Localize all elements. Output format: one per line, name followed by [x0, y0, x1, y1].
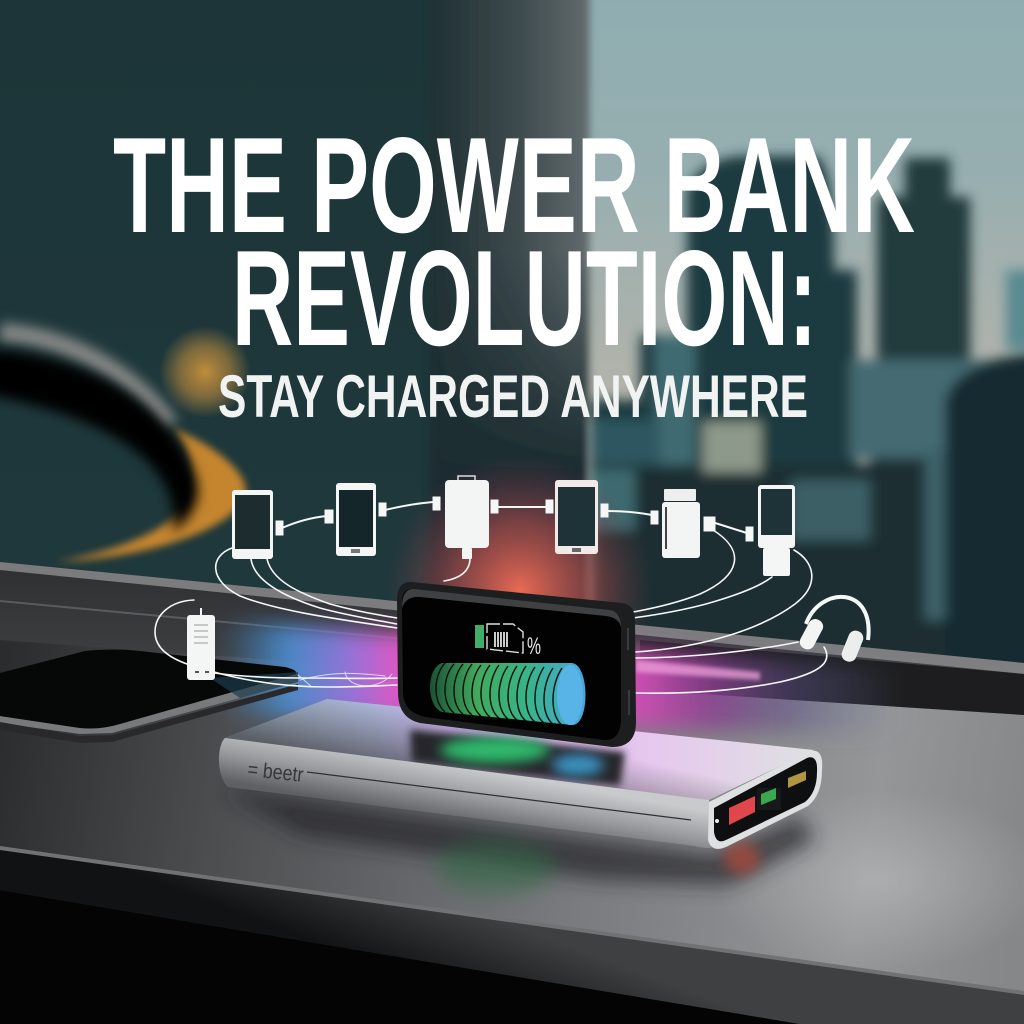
red glow: [385, 455, 655, 725]
white power adapter: [187, 608, 215, 680]
seam line: [307, 772, 691, 820]
title: [113, 109, 915, 430]
end face with ports: [708, 751, 822, 849]
green reflection: [410, 730, 625, 786]
phone 6 with plug: [758, 485, 795, 576]
charging cables: [155, 530, 827, 693]
reflection on desk: [222, 790, 815, 894]
colour glow across sill and desk: [220, 620, 900, 735]
top face: [225, 699, 814, 800]
connected devices row: [232, 476, 795, 576]
front face: [219, 738, 716, 848]
screen: [402, 589, 621, 740]
battery level icon: [475, 624, 541, 660]
green port: [757, 788, 781, 810]
brand mark: = beetr: [246, 758, 305, 787]
indicator light: [715, 819, 719, 823]
side buttons: [628, 628, 629, 715]
blurred curved object: [0, 332, 246, 562]
tablet on desk: [0, 650, 298, 743]
battery level icon: %: [527, 633, 541, 660]
short connector links: [276, 497, 753, 541]
phone 4: [555, 480, 598, 554]
case: [397, 582, 636, 747]
phone 2: [336, 483, 376, 556]
usb-c port: [788, 771, 806, 788]
desk and window sill: [0, 562, 1024, 1024]
desk front edge: [0, 848, 1024, 1024]
phone 1: [232, 490, 273, 559]
device 5: [662, 489, 700, 558]
black power bank with display: [397, 582, 636, 747]
blurred orange light: [159, 326, 251, 418]
hub device 3: [445, 476, 489, 559]
silver power bank: [219, 699, 822, 894]
headphones: [797, 597, 869, 664]
red port: [729, 796, 755, 825]
energy cylinder: [430, 663, 586, 725]
